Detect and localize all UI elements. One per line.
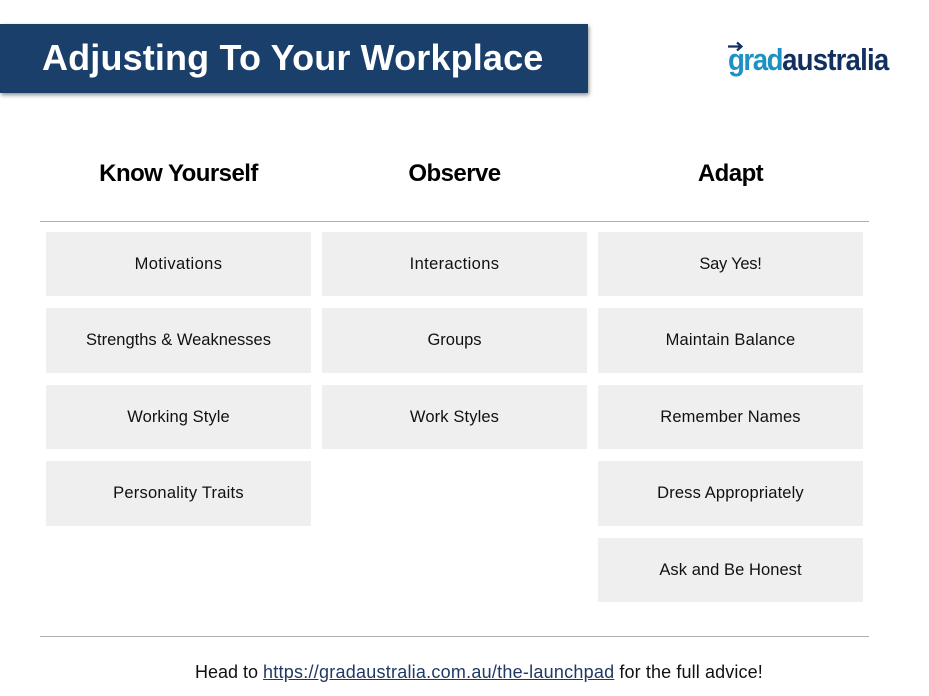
icon: logo arrow — [728, 42, 744, 52]
logo: gradaustralia — [728, 42, 890, 77]
card: Work Styles — [322, 384, 587, 449]
card: Remember Names: Remember Names — [660, 408, 801, 426]
card: Say Yes! — [598, 232, 863, 296]
column heading: Adapt: Adapt — [698, 160, 763, 187]
card: Personality Traits — [46, 461, 311, 526]
card: Groups — [322, 308, 587, 372]
card: Working Style — [46, 384, 311, 449]
footer text with link: Head to https://gradaustralia.com.au/the-launchpad for the full advice! — [195, 662, 763, 682]
card: Maintain Balance: Maintain Balance — [666, 331, 795, 349]
card: Ask and Be Honest: Ask and Be Honest — [659, 560, 802, 578]
card: Dress Appropriately — [598, 461, 863, 526]
card: Remember Names — [598, 384, 863, 449]
card: Ask and Be Honest — [598, 538, 863, 602]
card: Motivations — [46, 232, 311, 296]
card: Interactions: Interactions — [410, 254, 499, 272]
column heading: Know Yourself: Know Yourself — [99, 160, 258, 187]
card: Strengths & Weaknesses — [46, 308, 311, 372]
card: Motivations: Motivations — [135, 254, 222, 272]
logo wordmark: gradaustralia — [728, 42, 888, 77]
column heading: Observe: Observe — [408, 160, 501, 187]
card: Working Style: Working Style — [127, 408, 230, 426]
card: Personality Traits: Personality Traits — [113, 484, 244, 502]
title: Adjusting To Your Workplace — [42, 37, 543, 78]
card: Say Yes!: Say Yes! — [699, 254, 762, 272]
card: Maintain Balance — [598, 308, 863, 372]
card: Dress Appropriately: Dress Appropriately — [657, 484, 804, 502]
card: Interactions — [322, 232, 587, 296]
card: Work Styles: Work Styles — [410, 408, 499, 426]
title banner — [0, 24, 588, 93]
card: Strengths & Weaknesses: Strengths & Weaknesses — [86, 331, 271, 349]
card: Groups: Groups — [427, 331, 482, 349]
